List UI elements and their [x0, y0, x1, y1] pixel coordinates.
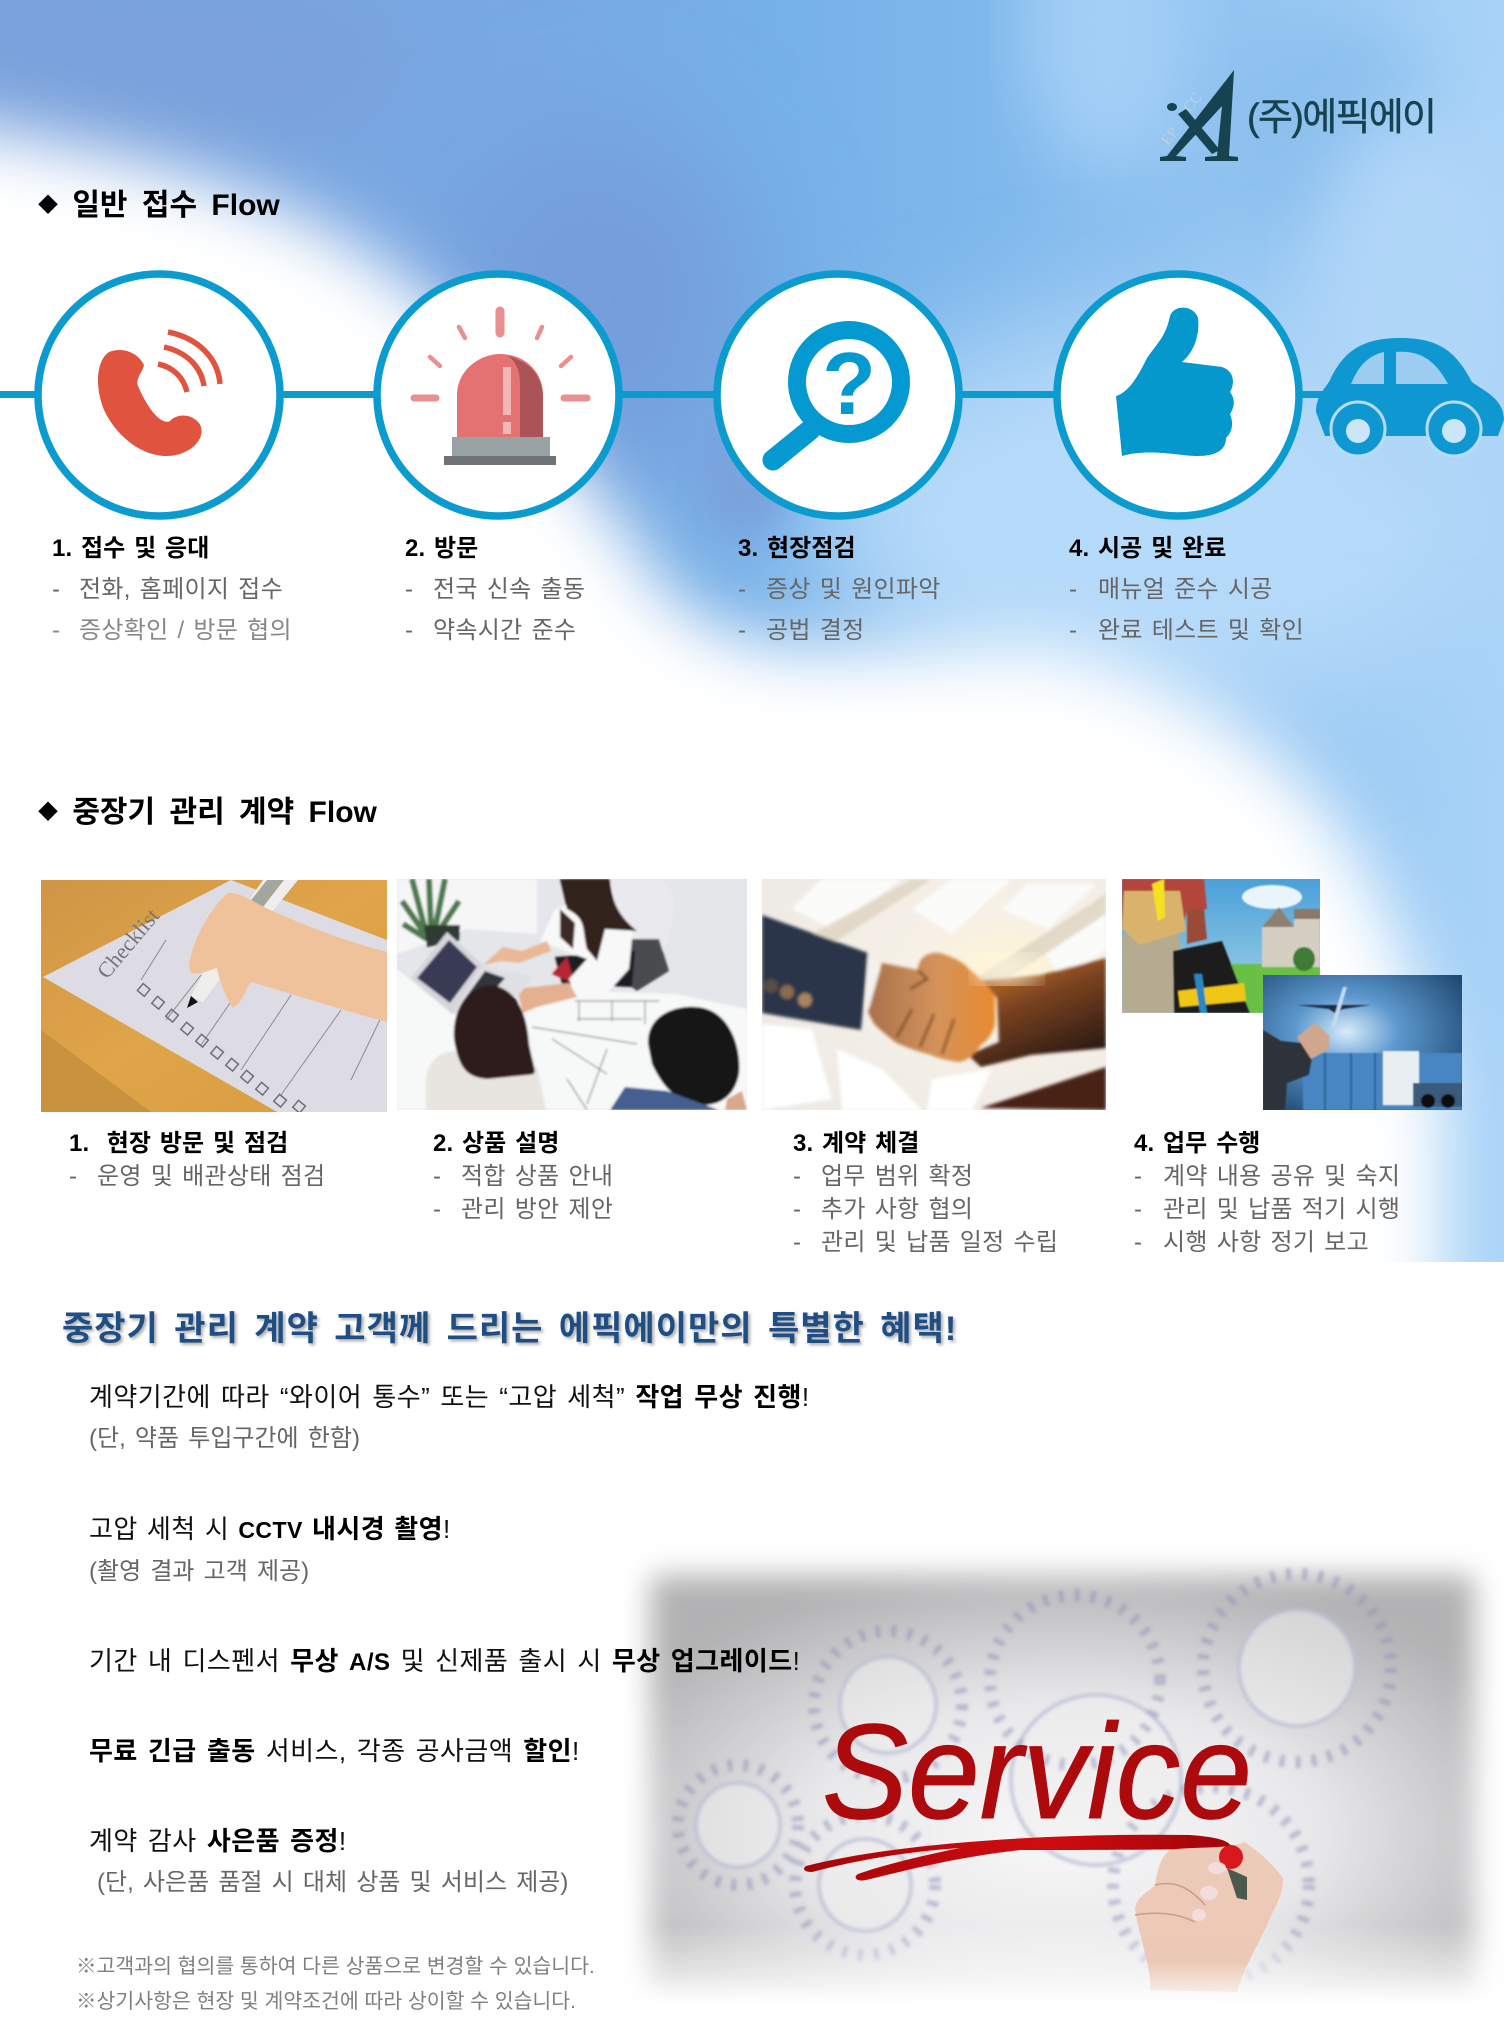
step 4 text: 4. 시공 및 완료 [1069, 535, 1226, 562]
footnotes: ※상기사항은 현장 및 계약조건에 따라 상이할 수 있습니다. [76, 1990, 576, 2013]
benefit 3: 기간 내 디스펜서 무상 A/S 및 신제품 출시 시 무상 업그레이드! [89, 1646, 800, 1676]
long-term step 3 text: 관리 및 납품 일정 수립 [821, 1229, 1058, 1256]
long-term step 3 text: 추가 사항 협의 [821, 1196, 973, 1223]
long-term step 1 text: 운영 및 배관상태 점검 [97, 1163, 325, 1190]
step 1 text: 증상확인 / 방문 협의 [79, 617, 292, 644]
step 2 text: 2. 방문 [405, 535, 478, 562]
long-term step 2 text [433, 1130, 613, 1223]
long-term step 2 text: - [433, 1163, 441, 1190]
benefit 2: 고압 세척 시 CCTV 내시경 촬영! [89, 1514, 451, 1544]
step 3 text: 공법 결정 [766, 617, 864, 644]
service word: Service [822, 1696, 1252, 1847]
benefit 5: (단, 사은품 품절 시 대체 상품 및 서비스 제공) [97, 1869, 568, 1896]
long-term step 2 text: 관리 방안 제안 [461, 1196, 613, 1223]
benefit 2 [89, 1514, 451, 1585]
long-term step 4 text: 시행 사항 정기 보고 [1163, 1229, 1369, 1256]
photo backdrop [650, 1575, 1475, 2005]
long-term step 1 text: - [69, 1163, 77, 1190]
long-term step 4 text: 관리 및 납품 적기 시행 [1163, 1196, 1400, 1223]
step 2 text: 약속시간 준수 [433, 617, 576, 644]
logo [1159, 70, 1437, 161]
step 4 text: - [1069, 576, 1077, 603]
benefit 5: 계약 감사 사은품 증정! [89, 1826, 347, 1856]
long-term step 2 text: 2. 상품 설명 [433, 1130, 559, 1157]
long-term step 3 text [793, 1130, 1058, 1256]
photo 4b: logistics [1263, 975, 1462, 1110]
long-term step 4 text: 4. 업무 수행 [1134, 1130, 1260, 1157]
long-term step 3 text: - [793, 1163, 801, 1190]
step 3 text: - [738, 617, 746, 644]
car icon [1316, 338, 1504, 458]
step 2 text [405, 535, 585, 644]
benefit 2: (촬영 결과 고객 제공) [89, 1558, 309, 1585]
step 1 text: 전화, 홈페이지 접수 [79, 576, 283, 603]
step 4 text: - [1069, 617, 1077, 644]
long-term step 4 text: - [1134, 1163, 1142, 1190]
step 3 text [738, 535, 941, 644]
long-term step 4 text [1134, 1130, 1400, 1256]
benefit 5 [89, 1826, 568, 1896]
long-term step 3 text: 업무 범위 확정 [821, 1163, 973, 1190]
step 2 text: 전국 신속 출동 [433, 576, 585, 603]
step 1 text: - [52, 576, 60, 603]
step circle 3: magnifier icon: ? [822, 334, 876, 433]
benefits title: 중장기 관리 계약 고객께 드리는 에픽에이만의 특별한 혜택! [62, 1310, 957, 1348]
step 4 text [1069, 535, 1304, 644]
footnotes: ※고객과의 협의를 통하여 다른 상품으로 변경할 수 있습니다. [76, 1955, 595, 1978]
benefit 1: 계약기간에 따라 “와이어 통수” 또는 “고압 세척” 작업 무상 진행! [89, 1382, 810, 1412]
bottom fade of photo [620, 1925, 1500, 2019]
long-term step 1 text [69, 1130, 325, 1190]
step 1 text [52, 535, 292, 644]
benefit 1: (단, 약품 투입구간에 한함) [89, 1425, 360, 1452]
logo mark A: EP [1159, 125, 1182, 148]
long-term step 3 text: 3. 계약 체결 [793, 1130, 919, 1157]
long-term step 4 text: 계약 내용 공유 및 숙지 [1163, 1163, 1400, 1190]
benefit 4: 무료 긴급 출동 서비스, 각종 공사금액 할인! [89, 1736, 580, 1766]
step 3 text: 증상 및 원인파악 [766, 576, 941, 603]
photo 3: handshake [762, 879, 1106, 1110]
step circle 3: magnifier icon [713, 270, 963, 520]
step 3 text: 3. 현장점검 [738, 535, 856, 562]
heading: long-term contract flow: ◆ 중장기 관리 계약 Flow [38, 796, 377, 829]
long-term step 2 text: 적합 상품 안내 [461, 1163, 613, 1190]
step circle 4: thumbs up icon [1053, 270, 1303, 520]
long-term step 2 text: - [433, 1196, 441, 1223]
logo name: (주)에픽에이 [1247, 97, 1437, 139]
step circle 1: phone icon [34, 270, 284, 520]
photo 4a: tools and house [1122, 879, 1320, 1013]
hand with marker [1135, 1842, 1283, 1992]
heading: general flow: ◆ 일반 접수 Flow [38, 189, 280, 222]
step 4 text: 매뉴얼 준수 시공 [1098, 576, 1273, 603]
step 1 text: - [52, 617, 60, 644]
gears [678, 1574, 1391, 1983]
flow connector line [0, 391, 1330, 398]
footnotes [76, 1955, 595, 2013]
background: blue gradient wash [0, 0, 1504, 1262]
benefit 1 [89, 1382, 810, 1452]
service photo [633, 1558, 1492, 1994]
underline stroke [804, 1835, 1232, 1881]
long-term step 4 text: - [1134, 1196, 1142, 1223]
photo 1: checklist: Checklist [92, 903, 164, 983]
long-term step 1 text: 1. 현장 방문 및 점검 [69, 1130, 288, 1157]
logo mark A: CC [1181, 90, 1205, 115]
photo 1: checklist [41, 880, 387, 1112]
step 3 text: - [738, 576, 746, 603]
photo 2: office meeting [397, 879, 747, 1110]
step 2 text: - [405, 617, 413, 644]
long-term step 3 text: - [793, 1196, 801, 1223]
step circle 2: alarm icon [373, 270, 623, 520]
step 4 text: 완료 테스트 및 확인 [1098, 617, 1304, 644]
logo mark A [1159, 70, 1238, 161]
long-term step 4 text: - [1134, 1229, 1142, 1256]
step 2 text: - [405, 576, 413, 603]
step 1 text: 1. 접수 및 응대 [52, 535, 209, 562]
long-term step 3 text: - [793, 1229, 801, 1256]
